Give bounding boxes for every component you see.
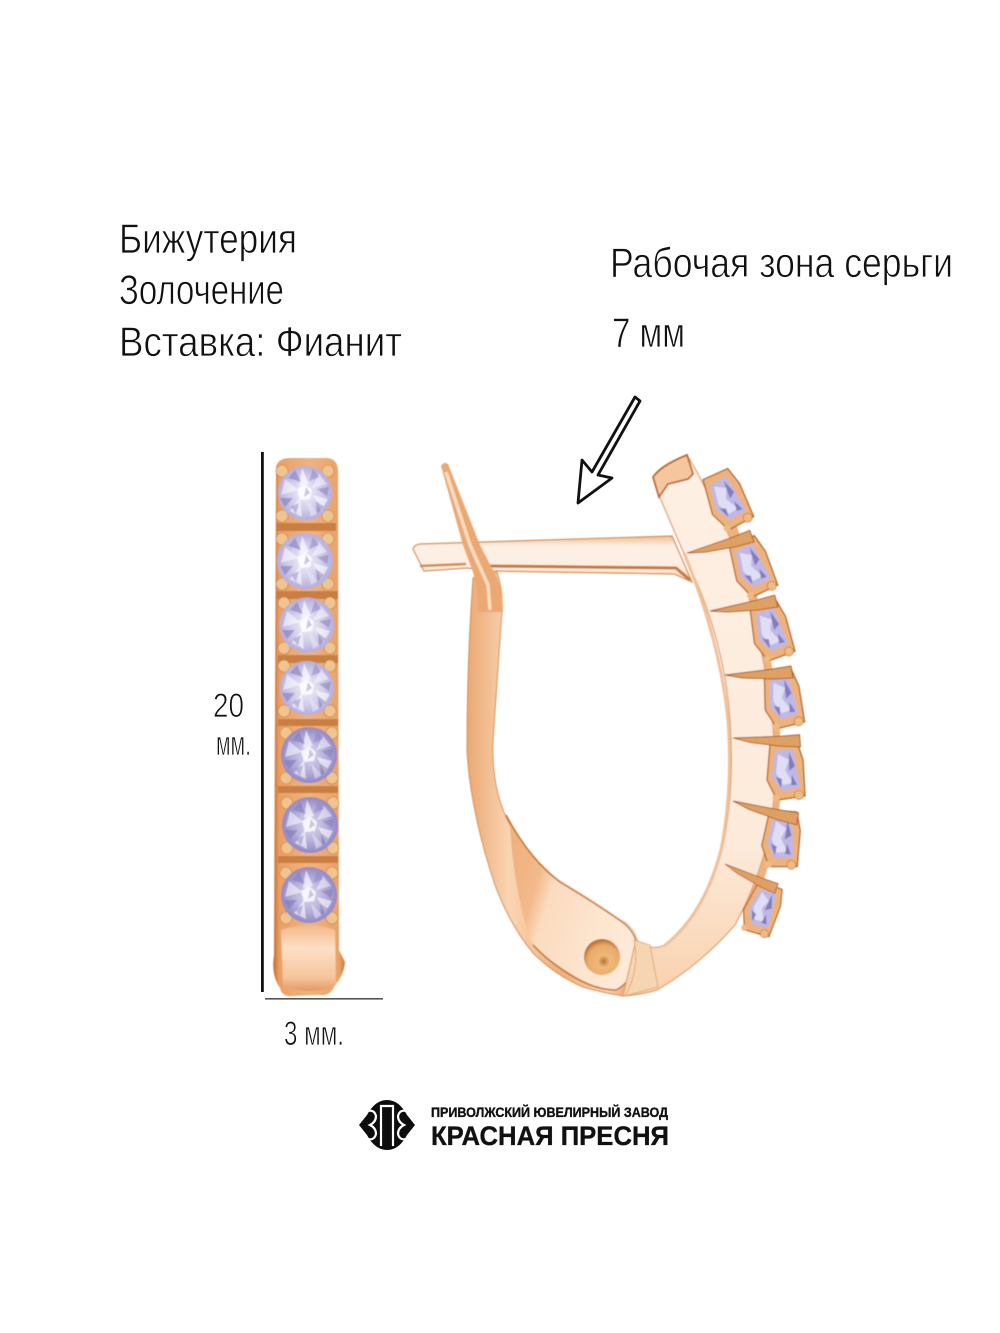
pin tip [441,463,503,612]
earring: front view with stones [273,458,345,996]
back lever [467,572,638,996]
setting backing band [712,478,776,905]
lower plain section [281,925,336,991]
separators between stones [276,523,338,863]
prongs [276,465,339,924]
label: 20 мм.: 20 [213,687,244,725]
rivet [584,939,620,975]
logo line 1: ПРИВОЛЖСКИЙ ЮВЕЛИРНЫЙ ЗАВОД [431,1105,668,1120]
spacer spikes [685,530,802,894]
top cap [653,455,693,497]
logo mark [359,1100,415,1150]
earring body [273,458,345,996]
line: Золочение: Золочение [119,266,284,313]
line: Бижутерия: Бижутерия [119,215,297,262]
connector at hinge [625,940,658,996]
logo line 2: КРАСНАЯ ПРЕСНЯ [431,1121,669,1151]
logo [359,1100,669,1151]
text block: working zone [610,239,953,356]
label: 20 мм.: мм. [216,725,251,763]
earring: side view [413,455,805,996]
line: Вставка: Фианит: Вставка: Фианит [119,318,402,365]
hoop body [623,455,775,996]
label: 3 мм.: 3 мм. [284,1015,344,1053]
lever lobe [510,822,638,990]
line: 7 мм: 7 мм [612,309,685,356]
label: 20 мм. [213,687,251,763]
lobe rim [506,815,638,990]
settings and stones [700,466,805,941]
text block: product description [119,215,402,365]
arrow: pointing to working zone [578,397,640,503]
stones [277,466,338,923]
hoop inner edge [664,553,729,946]
dimension: width line [265,998,383,1000]
horizontal pin [413,536,692,582]
dimension: height line [261,452,264,992]
